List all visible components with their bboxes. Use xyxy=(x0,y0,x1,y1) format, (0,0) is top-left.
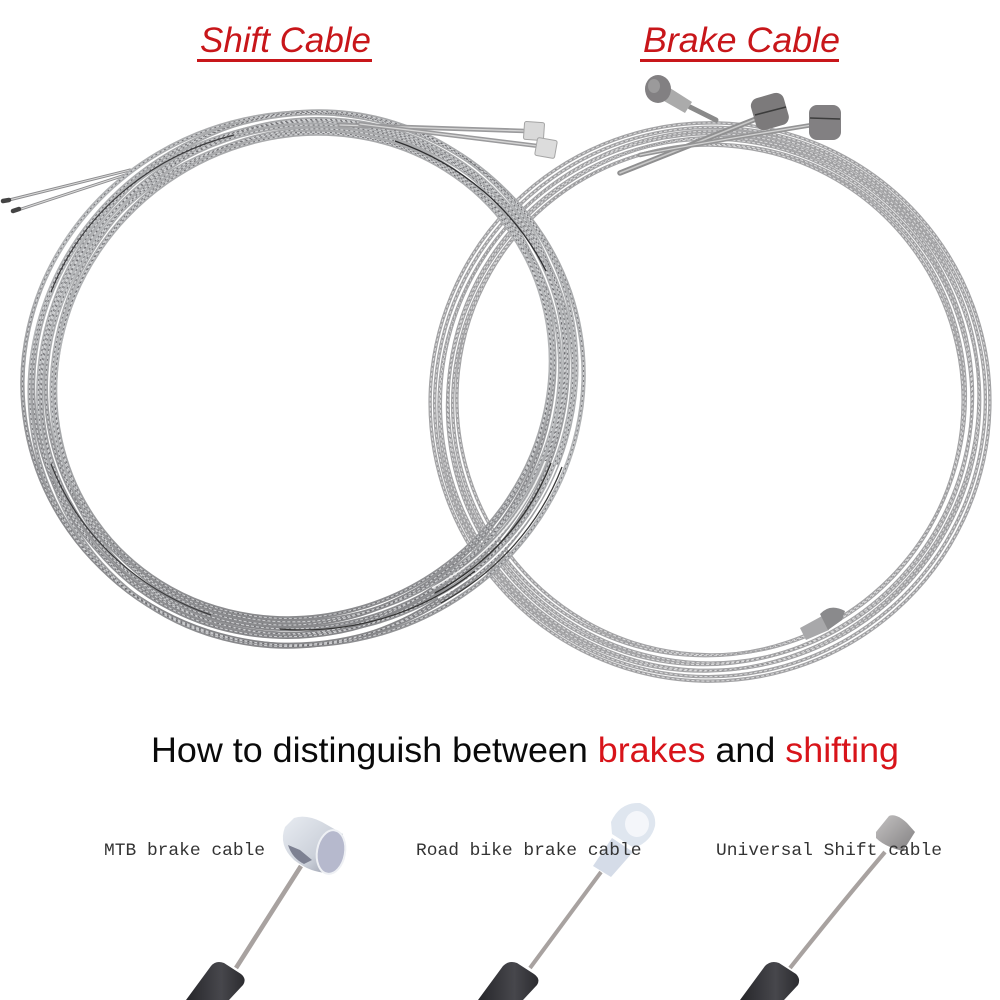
shift cable free wires left xyxy=(3,170,130,211)
cable detail: universal shift xyxy=(716,815,942,1000)
label: MTB brake cable xyxy=(104,841,265,861)
label: Universal Shift cable xyxy=(716,841,942,861)
brake cable coil xyxy=(327,19,1000,785)
barrel heads xyxy=(749,91,841,140)
road brake head xyxy=(645,75,692,113)
title: Shift Cable: Shift Cable xyxy=(200,21,371,60)
head xyxy=(593,803,655,877)
cable detail: road brake xyxy=(416,803,655,1000)
heading: How to distinguish between brakes and shifting xyxy=(151,731,899,770)
label: Road bike brake cable xyxy=(416,841,641,861)
lower barrel on coil xyxy=(800,608,845,640)
wire xyxy=(236,866,301,968)
cable detail: MTB brake xyxy=(104,817,349,1000)
head xyxy=(876,815,915,851)
brake cable free wires xyxy=(620,107,812,173)
shift cable end barrels xyxy=(523,121,557,159)
title: Brake Cable: Brake Cable xyxy=(643,21,840,60)
shift cable free wires right xyxy=(340,124,538,146)
dark strand gaps and contrast stripes xyxy=(51,135,562,630)
sleeve xyxy=(186,962,245,1000)
shift cable coil xyxy=(0,3,677,755)
head xyxy=(283,817,349,876)
